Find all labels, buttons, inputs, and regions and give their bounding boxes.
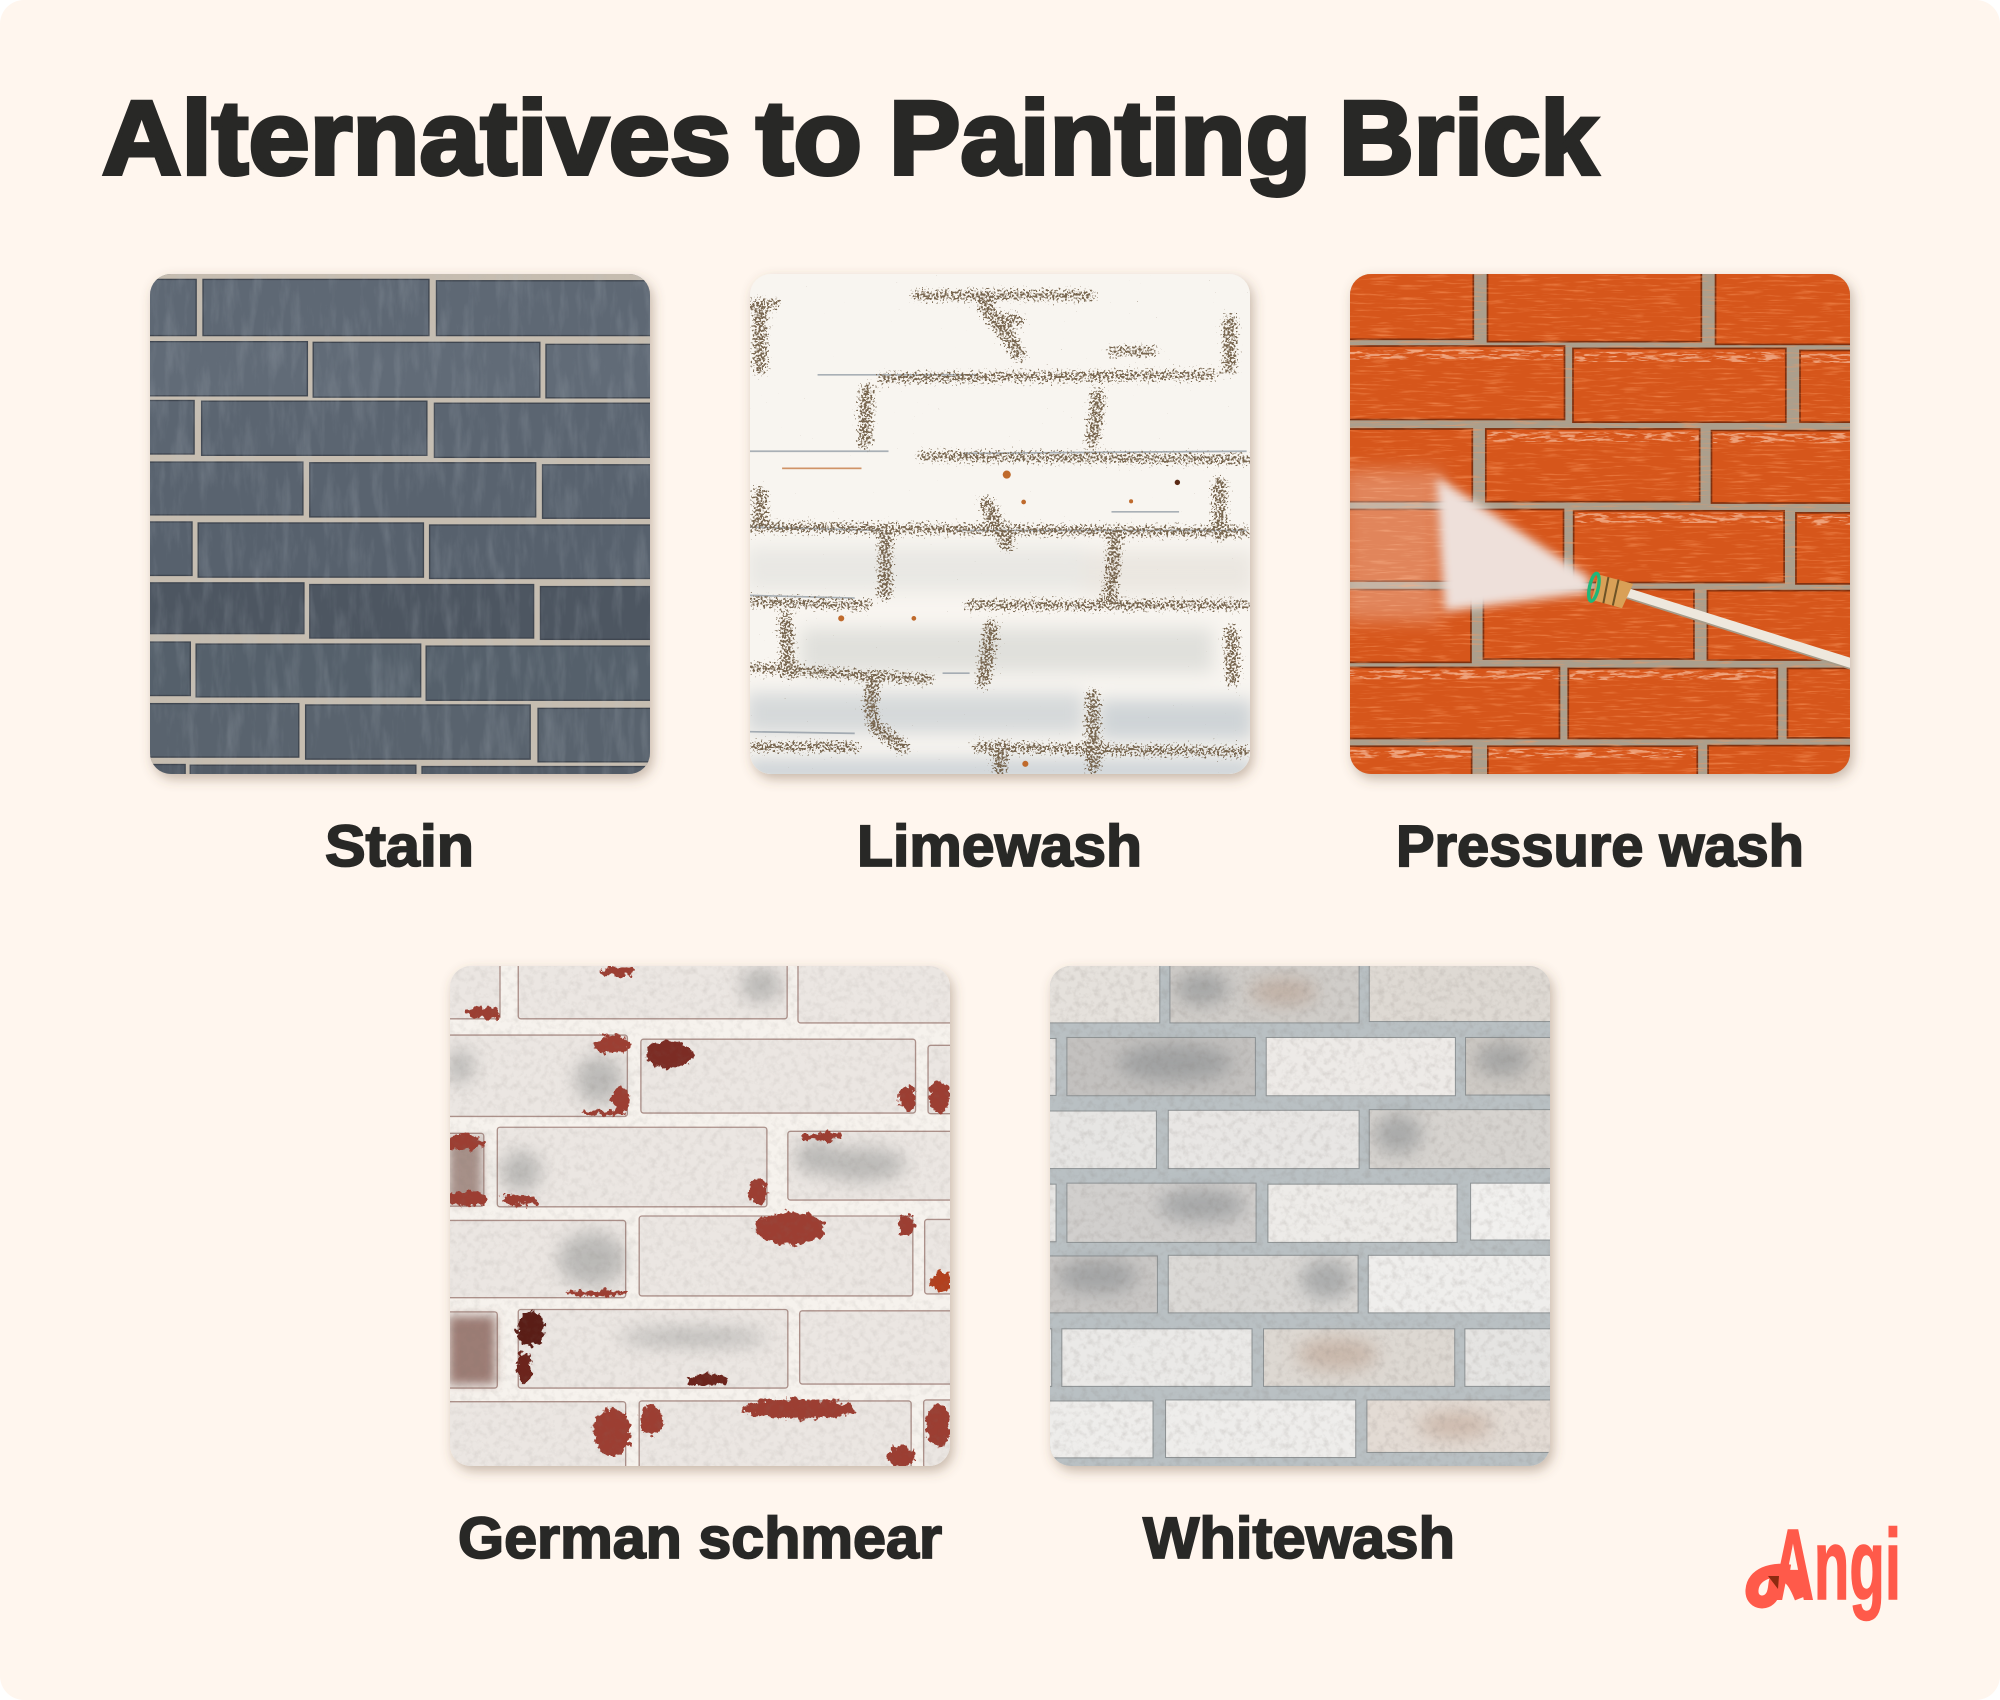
photo: german schmear brick wall bbox=[436, 961, 955, 1469]
label: whitewash: Whitewash bbox=[1143, 1506, 1455, 1571]
photo: slate-gray stained brick wall bbox=[144, 274, 657, 780]
panel: stain bbox=[144, 274, 657, 879]
logo: Angi bbox=[1752, 1509, 1901, 1621]
logo: Angi: Angi bbox=[1772, 1509, 1901, 1621]
title: Brick bbox=[1339, 80, 1599, 197]
label: limewash: Limewash bbox=[857, 814, 1142, 879]
brick highlights bbox=[1350, 349, 1852, 758]
label: german schmear: German schmear bbox=[458, 1506, 942, 1571]
title: Alternatives bbox=[102, 80, 731, 197]
panel: limewash bbox=[747, 274, 1253, 879]
title: to bbox=[756, 80, 862, 197]
photo: orange brick wall being pressure washed bbox=[1343, 270, 1854, 780]
label: stain: Stain bbox=[325, 814, 474, 879]
panel: german schmear bbox=[436, 961, 955, 1571]
panel: whitewash bbox=[1047, 961, 1553, 1571]
photo: whitewashed brick wall with gray mortar bbox=[1047, 961, 1553, 1466]
spray haze bbox=[1343, 470, 1441, 622]
photo: limewashed white brick wall bbox=[747, 274, 1253, 782]
pressure wand bbox=[1587, 572, 1853, 670]
water spray bbox=[1436, 476, 1590, 612]
label: pressure wash: Pressure wash bbox=[1396, 814, 1804, 879]
title: Painting bbox=[889, 80, 1311, 197]
panel: pressure wash bbox=[1343, 270, 1854, 879]
